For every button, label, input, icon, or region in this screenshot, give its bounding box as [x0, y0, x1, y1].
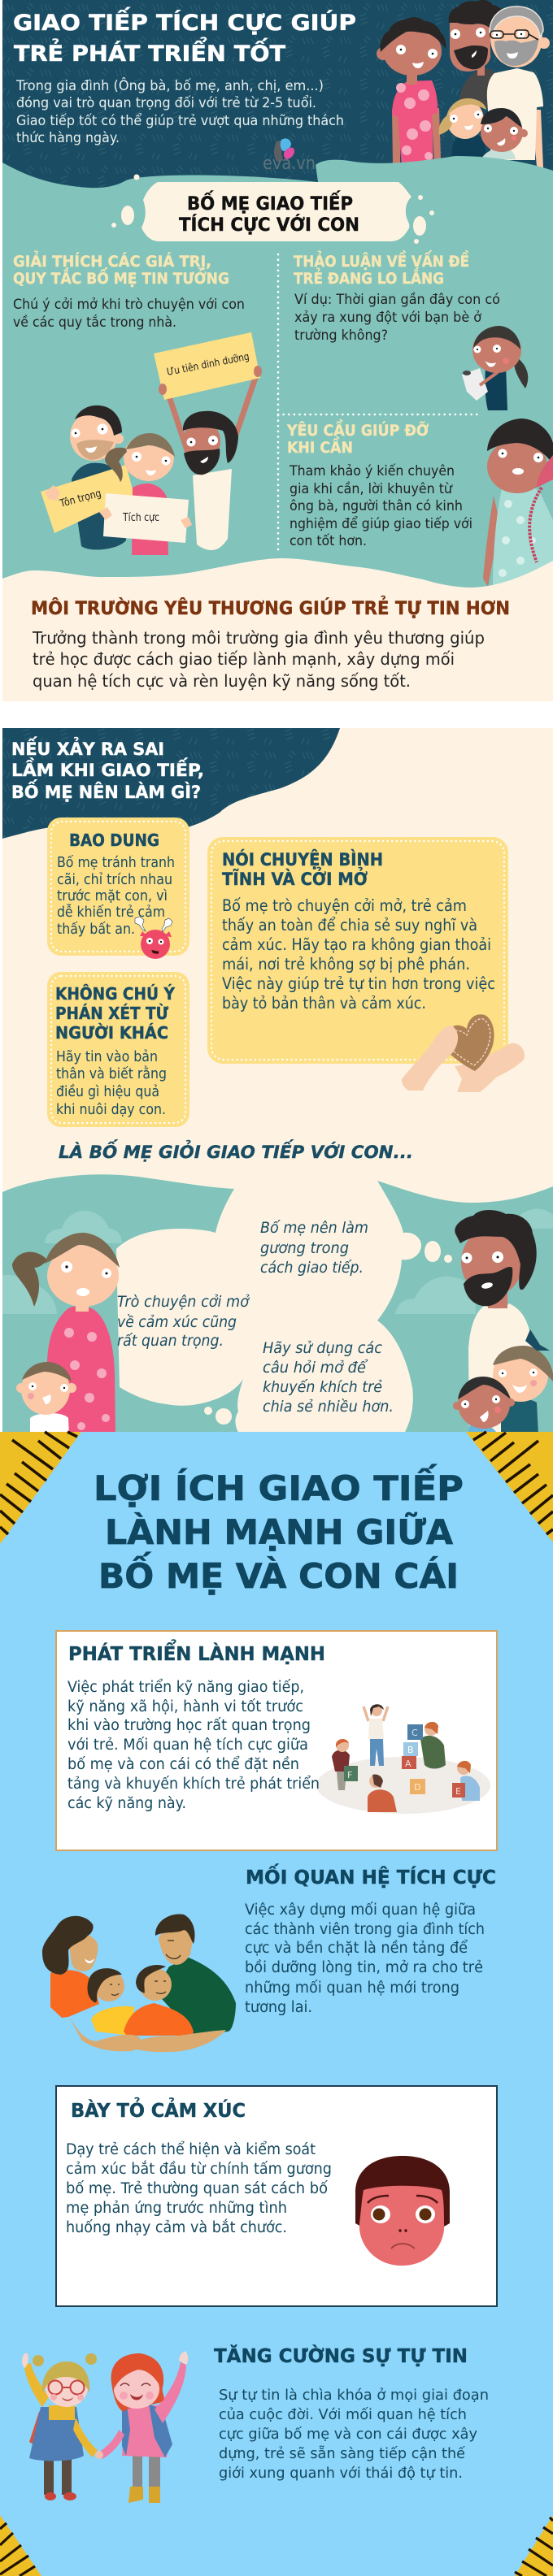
text: tolerance: thấy bất an. — [57, 921, 135, 938]
banner — [142, 182, 411, 241]
block D — [410, 1779, 425, 1794]
cream background — [2, 728, 553, 1435]
heading: what to do: NẾU XẢY RA SAI — [11, 736, 164, 759]
text: expressing emotions: mẹ phản ứng trước những tình — [66, 2200, 287, 2217]
text: expressing emotions — [66, 2141, 332, 2236]
block D: D — [414, 1782, 420, 1793]
sign: respect: Tôn trọng — [58, 488, 102, 510]
text: loving environment: trẻ học được cách giao tiếp lành mạnh, xây dựng mối — [33, 649, 455, 669]
text: expressing emotions: cảm xúc bắt đầu từ chính tấm gương — [66, 2161, 332, 2178]
text: expressing emotions: huống nhạy cảm và bắt chước. — [66, 2219, 287, 2236]
text: tolerance — [57, 854, 175, 938]
title: GIAO TIẾP TÍCH CỰC GIÚP — [13, 7, 356, 36]
navy blob — [2, 728, 340, 839]
text: healthy development: Việc phát triển kỹ năng giao tiếp, — [67, 1679, 304, 1696]
title: benefits — [94, 1464, 464, 1596]
heading: ask for help: YÊU CẦU GIÚP ĐỠ — [286, 420, 429, 440]
text: discuss worries: Ví dụ: Thời gian gần đây con có — [294, 291, 500, 308]
boy — [481, 108, 528, 159]
heading: what to do: LẦM KHI GIAO TIẾP, — [11, 757, 204, 780]
text: building confidence: dựng, trẻ sẽ sẵn sàng tiếp cận thế — [219, 2445, 465, 2462]
text: speak calmly: cảm xúc. Hãy tạo ra không gian thoải — [222, 935, 491, 954]
heading: healthy development: PHÁT TRIỂN LÀNH MẠNH — [68, 1640, 325, 1665]
heading: building confidence: TĂNG CƯỜNG SỰ TỰ TIN — [214, 2344, 468, 2367]
tip: talk about feelings — [117, 1293, 250, 1350]
intro text: Trong gia đình (Ông bà, bố mẹ, anh, chị, em...) — [15, 76, 324, 94]
intro text — [15, 76, 344, 146]
girl — [105, 433, 175, 555]
title — [13, 7, 356, 67]
illustration: two schoolgirls — [22, 2352, 188, 2503]
text: ask for help: Tham khảo ý kiến chuyên — [289, 462, 455, 479]
father — [449, 0, 503, 108]
father's green shirt — [155, 1958, 236, 2036]
text: building confidence: giới xung quanh với thái độ tự tin. — [219, 2465, 463, 2482]
mother — [377, 17, 446, 167]
watermark: eva.vn — [263, 138, 316, 174]
text: ask for help: nghiệm để giúp giao tiếp với — [290, 515, 472, 532]
tip: talk about feelings: Trò chuyện cởi mở — [117, 1293, 250, 1311]
text: speak calmly: bày tỏ bản thân và cảm xúc. — [222, 994, 426, 1013]
tip: open questions: khuyến khích trẻ — [263, 1378, 382, 1396]
block C: C — [411, 1728, 418, 1738]
tip: be an example: gương trong — [260, 1239, 349, 1257]
decoration: bottom left corner — [0, 2515, 41, 2576]
embracing arms — [68, 2015, 226, 2052]
text: building confidence: cực giữa bố mẹ và con cái được xây — [219, 2426, 477, 2443]
heading: ask for help: KHI CẦN — [287, 437, 353, 457]
illustration: woman on phone — [483, 418, 553, 587]
text: building confidence: Sự tự tin là chìa khóa ở mọi giai đoạn — [219, 2387, 489, 2404]
heading: positive relationships: MỐI QUAN HỆ TÍCH CỰC — [246, 1863, 496, 1889]
text: speak calmly: mái, nơi trẻ không sợ bị phê phán. — [222, 955, 470, 974]
text: positive relationships: tương lai. — [245, 1999, 312, 2016]
text: healthy development — [67, 1679, 320, 1812]
text: ask for help — [289, 462, 472, 549]
child in maroon — [332, 1739, 350, 1790]
icon: hands holding heart — [402, 1014, 525, 1092]
sign: positive: Tích cực — [122, 512, 159, 524]
navy header background — [2, 0, 553, 195]
text: discuss worries: xảy ra xung đột với bạn bè ở — [294, 310, 482, 326]
tip: open questions: chia sẻ nhiều hơn. — [263, 1398, 394, 1416]
text: discuss worries: trường không? — [294, 327, 388, 344]
illustration: mother and child — [12, 1233, 120, 1435]
title: benefits: LÀNH MẠNH GIỮA — [105, 1511, 454, 1552]
sign: nutrition: Ưu tiên dinh dưỡng — [166, 350, 250, 378]
heading: discuss worries: THẢO LUẬN VỀ VẤN ĐỀ — [294, 251, 469, 271]
text: healthy development: với trẻ. Mối quan hệ tích cực giữa — [67, 1737, 308, 1754]
text: healthy development: khi vào trường học rất quan trọng — [67, 1717, 311, 1734]
heading: ask for help — [286, 420, 429, 457]
text: ask for help: gia khi cần, lời khuyên từ — [290, 480, 453, 497]
text: ignore judgement: điều gì hiệu quả — [56, 1083, 159, 1100]
text: loving environment — [32, 628, 485, 691]
text: tolerance: dễ khiến trẻ cảm — [57, 904, 165, 921]
heading: tolerance: BAO DUNG — [69, 830, 159, 850]
subheading: good parents: LÀ BỐ MẸ GIỎI GIAO TIẾP VỚI CON... — [59, 1139, 413, 1162]
text: healthy development: kỹ năng xã hội, hành vi tốt trước — [67, 1698, 303, 1715]
block F — [344, 1766, 358, 1781]
text: positive relationships: những mối quan hệ mới trong — [245, 1980, 459, 1997]
text: explain values: về các quy tắc trong nhà. — [13, 314, 176, 331]
heading: speak calmly: TĨNH VÀ CỞI MỞ — [222, 867, 368, 889]
child in green — [420, 1722, 446, 1768]
block A — [402, 1756, 416, 1769]
heading: what to do: BỐ MẸ NÊN LÀM GÌ? — [11, 779, 201, 802]
thought cloud — [116, 1177, 421, 1435]
heading: what to do — [11, 736, 204, 802]
watermark: eva.vn: eva.vn — [263, 154, 316, 174]
thought bubbles — [204, 1241, 452, 1425]
icon: angry devil — [135, 917, 172, 959]
card: tolerance — [47, 817, 189, 959]
text: ignore judgement: thân và biết rằng — [56, 1065, 167, 1082]
decoration: bottom right corner — [515, 2515, 553, 2576]
illustration: girl with tissue — [462, 326, 528, 410]
intro text: Giao tiếp tốt có thể giúp trẻ vượt qua những thách — [16, 112, 344, 129]
block A: A — [405, 1759, 411, 1769]
text: discuss worries — [294, 291, 500, 344]
sign: positive — [99, 493, 192, 543]
sign: respect — [41, 465, 134, 533]
text: explain values: Chú ý cởi mở khi trò chuyện với con — [13, 297, 245, 313]
panel: positive communication — [2, 0, 553, 701]
tip: talk about feelings: về cảm xúc cũng — [117, 1313, 237, 1331]
text: expressing emotions: bố mẹ. Trẻ thường quan sát cách bố — [66, 2180, 329, 2197]
decoration: top right corner — [466, 1432, 553, 1542]
decoration: top left corner — [0, 1432, 81, 1544]
red-haired girl — [95, 2352, 188, 2503]
heading: speak calmly — [222, 848, 383, 889]
column: ask for help — [286, 420, 472, 549]
child in orange — [368, 1774, 397, 1812]
text: ignore judgement: khi nuôi dạy con. — [56, 1102, 166, 1118]
child in blue — [452, 1761, 480, 1801]
title: benefits: LỢI ÍCH GIAO TIẾP — [94, 1464, 464, 1508]
heading: explain values — [13, 252, 229, 288]
text: positive relationships: các thành viên trong gia đình tích — [245, 1921, 485, 1938]
heading: explain values: GIẢI THÍCH CÁC GIÁ TRỊ, — [13, 252, 211, 271]
text: speak calmly: Bố mẹ trò chuyện cởi mở, trẻ cảm — [222, 896, 467, 915]
text: loving environment: Trưởng thành trong môi trường gia đình yêu thương giúp — [32, 628, 485, 648]
text: loving environment: quan hệ tích cực và rèn luyện kỹ năng sống tốt. — [33, 671, 411, 691]
block C — [407, 1724, 423, 1740]
text: tolerance: Bố mẹ tránh tranh — [57, 854, 175, 871]
text: expressing emotions: Dạy trẻ cách thể hiện và kiểm soát — [66, 2141, 316, 2158]
title: benefits: BỐ MẸ VÀ CON CÁI — [98, 1550, 459, 1596]
card: speak calmly — [207, 837, 525, 1092]
text: speak calmly: Việc này giúp trẻ tự tin hơn trong việc — [222, 974, 495, 993]
illustration: children playing with blocks — [316, 1704, 490, 1814]
grandfather — [487, 7, 550, 168]
text: speak calmly: thấy an toàn để chia sẻ suy nghĩ và — [222, 916, 477, 935]
illustration: father and children — [453, 1210, 553, 1435]
text: ask for help: con tốt hơn. — [290, 532, 367, 549]
card: ignore judgement — [47, 972, 189, 1127]
son's orange shirt — [124, 2003, 194, 2036]
illustration: hugging family — [42, 1915, 236, 2052]
card: expressing emotions — [56, 2086, 497, 2306]
icon: sad face — [355, 2156, 450, 2266]
heading: explain values: QUY TẮC BỐ MẸ TIN TƯỞNG — [13, 268, 229, 288]
text: explain values — [13, 297, 245, 331]
text: healthy development: bố mẹ và con cái có thể đặt nền — [67, 1756, 299, 1773]
intro text: đóng vai trò quan trọng đối với trẻ từ 2-5 tuổi. — [16, 94, 316, 111]
text: building confidence — [219, 2387, 489, 2482]
heading: speak calmly: NÓI CHUYỆN BÌNH — [222, 848, 383, 870]
banner: TÍCH CỰC VỚI CON — [179, 215, 359, 236]
girl with glasses — [22, 2353, 98, 2500]
heading: discuss worries: TRẺ ĐANG LO LẮNG — [294, 268, 444, 288]
heading: ignore judgement: NGƯỜI KHÁC — [55, 1023, 168, 1043]
panel: benefits — [0, 1432, 553, 2576]
tip: open questions: câu hỏi mở để — [263, 1359, 368, 1377]
heading: expressing emotions: BÀY TỎ CẢM XÚC — [71, 2097, 246, 2122]
heading: discuss worries — [294, 251, 469, 288]
text: positive relationships — [245, 1902, 485, 2016]
block B: B — [407, 1745, 414, 1755]
blue background — [0, 1432, 553, 2576]
block F: F — [347, 1770, 352, 1780]
teal wave background — [2, 1174, 553, 1435]
teal panel background — [2, 156, 553, 593]
dotted dividers — [278, 254, 481, 550]
illustration: parents and child with signs — [41, 332, 262, 555]
illustration: family — [377, 0, 550, 168]
text: ask for help: ông bà, người thân có kinh — [290, 498, 463, 514]
heading: loving environment: MÔI TRƯỜNG YÊU THƯƠNG GIÚP TRẺ TỰ TIN HƠN — [31, 596, 510, 619]
text: healthy development: các kỹ năng này. — [67, 1795, 186, 1812]
text: positive relationships: bồi dưỡng lòng tin, mở ra cho trẻ — [245, 1959, 483, 1976]
child in blue: E — [455, 1786, 461, 1797]
block B — [403, 1742, 418, 1756]
mother — [42, 1916, 98, 1975]
tip: open questions — [263, 1339, 394, 1416]
text: ignore judgement: Hãy tin vào bản — [56, 1049, 158, 1065]
daughter — [88, 1968, 124, 2002]
father — [155, 1915, 195, 1965]
panel: loving environment — [2, 558, 553, 701]
standing child — [364, 1704, 388, 1766]
sign: nutrition — [154, 332, 262, 400]
mother's orange top — [50, 1970, 99, 2018]
column: discuss worries — [294, 251, 500, 344]
text: tolerance: cãi, chỉ trích nhau — [57, 872, 172, 888]
text: tolerance: trước mặt con, vì — [57, 888, 168, 904]
text: building confidence: của cuộc đời. Với mối quan hệ tích — [219, 2406, 467, 2423]
heading: ignore judgement: KHÔNG CHÚ Ý — [55, 984, 175, 1004]
text: positive relationships: Việc xây dựng mối quan hệ giữa — [245, 1902, 476, 1919]
heading: ignore judgement — [55, 984, 175, 1043]
bearded man — [183, 411, 238, 550]
tip: be an example — [260, 1219, 368, 1277]
banner: BỐ MẸ GIAO TIẾP — [187, 191, 353, 215]
card: healthy development — [56, 1631, 497, 1850]
background clouds — [2, 1208, 553, 1314]
left man — [70, 405, 126, 549]
title: TRẺ PHÁT TRIỂN TỐT — [14, 37, 286, 67]
tip: be an example: Bố mẹ nên làm — [260, 1219, 368, 1237]
son — [136, 1965, 172, 2001]
blonde girl — [439, 98, 486, 156]
column: explain values — [13, 252, 245, 331]
intro text: thức hàng ngày. — [16, 130, 120, 146]
tip: talk about feelings: rất quan trọng. — [117, 1332, 224, 1350]
raised arms — [169, 378, 255, 455]
tip: be an example: cách giao tiếp. — [260, 1259, 364, 1277]
text: ignore judgement — [56, 1049, 167, 1118]
decorative bubbles — [111, 174, 434, 244]
tip: open questions: Hãy sử dụng các — [263, 1339, 383, 1357]
daughter's yellow top — [91, 2006, 134, 2036]
panel: when mistakes happen — [0, 728, 553, 2576]
text: positive relationships: cực và bền chặt là nền tảng để — [245, 1940, 468, 1957]
text: speak calmly — [222, 896, 495, 1013]
heading: ignore judgement: PHÁN XÉT TỪ — [55, 1004, 168, 1023]
text: healthy development: tảng và khuyến khích trẻ phát triển — [67, 1776, 320, 1793]
